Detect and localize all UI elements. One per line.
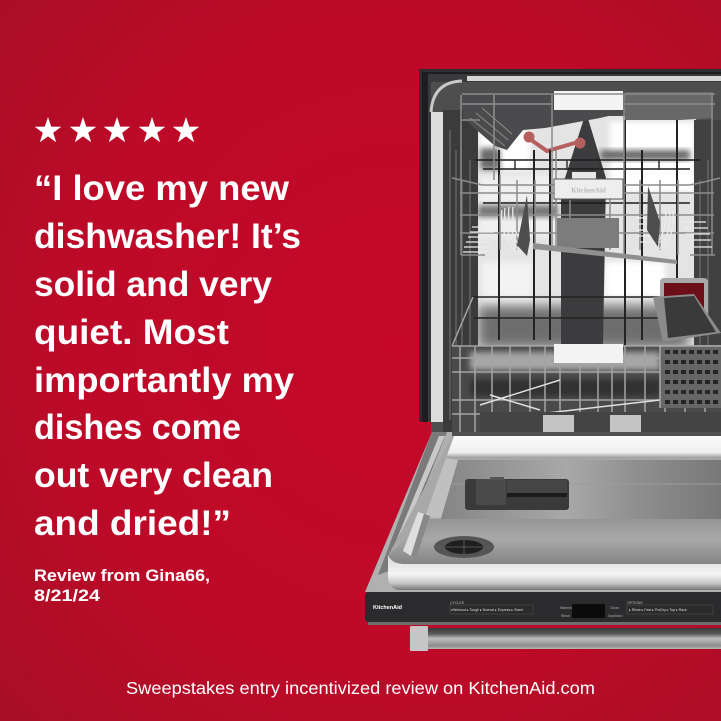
option buttons: OPTIONS <box>627 601 643 605</box>
control panel <box>365 592 721 625</box>
control panel: Warming <box>560 606 574 610</box>
review quote: quiet. Most <box>34 313 229 352</box>
door handle <box>410 626 721 651</box>
review quote: solid and very <box>34 265 273 304</box>
dish tines <box>463 207 712 254</box>
dark rack rails <box>475 160 700 203</box>
door body <box>365 432 721 592</box>
display <box>572 604 605 618</box>
dispenser <box>465 477 569 510</box>
review quote: dishwasher! It’s <box>34 217 301 256</box>
upper rack <box>452 94 720 255</box>
upper spray arm <box>527 137 578 151</box>
control panel: Sanitized <box>608 614 622 618</box>
star rating <box>35 117 199 142</box>
lower rack <box>452 297 721 434</box>
control panel: KitchenAid <box>373 605 402 611</box>
top label <box>554 91 623 110</box>
reviewer attribution <box>34 567 210 605</box>
review quote: out very clean <box>34 456 273 495</box>
top dark line <box>452 432 721 436</box>
cycle buttons: eWorkout ▸ Tough ▸ Normal ▸ Express ▸ Sheer <box>451 608 524 612</box>
lower spray housing <box>480 412 721 433</box>
control panel: Clean <box>610 606 619 610</box>
review quote <box>34 169 301 543</box>
dishwasher <box>365 69 721 651</box>
door side edge <box>378 432 447 575</box>
side ridge <box>403 512 424 556</box>
folding rack shelves <box>517 186 677 264</box>
review quote: “I love my new <box>34 169 290 208</box>
silverware basket lid <box>653 278 721 342</box>
middle label KitchenAid <box>554 179 623 199</box>
bottom label <box>554 344 623 363</box>
review quote: and dried!” <box>34 504 231 543</box>
open door <box>365 432 721 592</box>
top vent housing <box>463 92 625 150</box>
option buttons: ▸ Rinse ▸ Fast ▸ ProDry ▸ Top ▸ Rack <box>629 608 687 612</box>
cycle buttons: CYCLES <box>450 601 465 605</box>
option buttons <box>627 601 713 614</box>
tub interior <box>431 76 721 432</box>
door floor <box>389 458 721 564</box>
review quote: dishes come <box>34 408 241 447</box>
review quote: importantly my <box>34 361 295 400</box>
sweepstakes disclaimer: Sweepstakes entry incentivized review on KitchenAid.com <box>126 678 595 698</box>
rinse vent <box>434 536 494 558</box>
bottom white band <box>388 555 721 590</box>
cycle buttons <box>450 601 533 614</box>
vertical dark tub bars <box>498 120 678 345</box>
central spray column <box>561 112 606 345</box>
tub frame <box>419 69 721 422</box>
inner liner <box>388 436 721 566</box>
reviewer attribution: Review from Gina66, <box>34 567 210 585</box>
reviewer attribution: 8/21/24 <box>34 587 101 605</box>
middle label KitchenAid: KitchenAid <box>571 186 606 194</box>
top white band <box>446 436 721 458</box>
control panel: Rinse <box>561 614 570 618</box>
side walls <box>443 110 478 432</box>
